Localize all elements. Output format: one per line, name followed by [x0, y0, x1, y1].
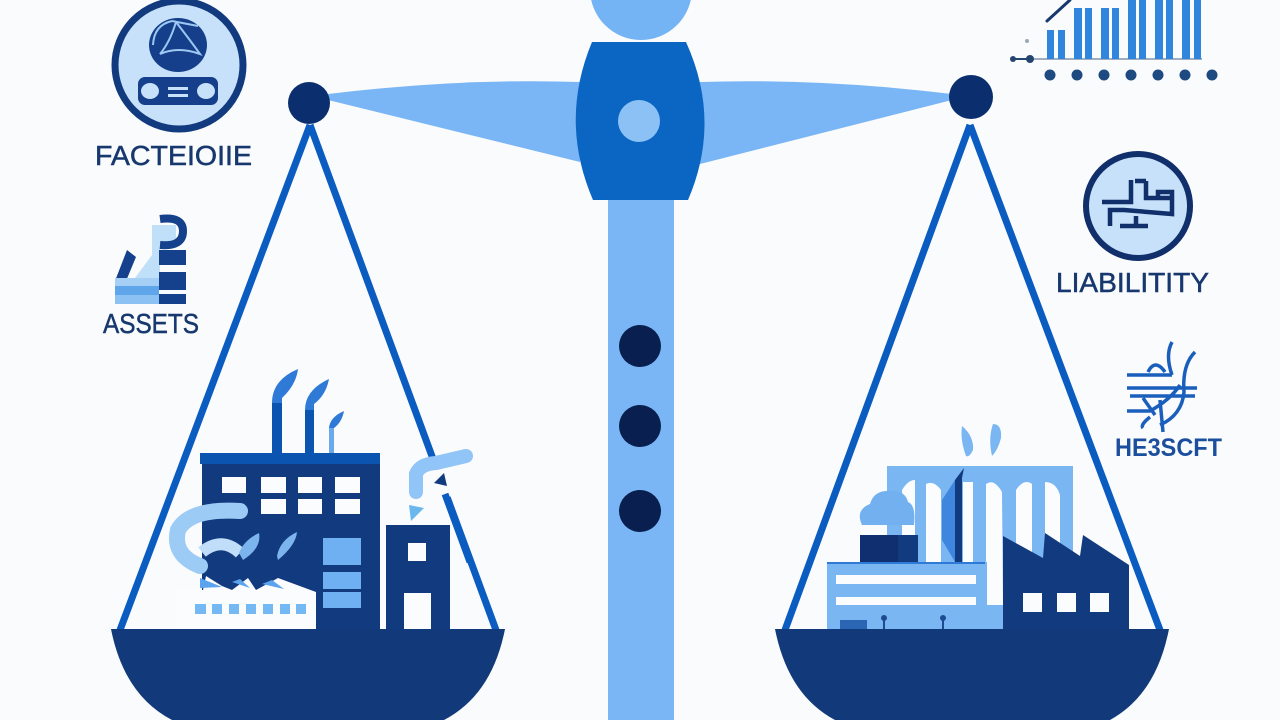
cross curves: [1142, 365, 1165, 428]
lower building: [827, 562, 987, 630]
factory windows: [1023, 593, 1109, 612]
connector block: [985, 605, 1003, 630]
white patch over string: [410, 450, 476, 522]
annex gap: [380, 530, 386, 630]
vertical pipes: [1160, 342, 1195, 432]
white base block: [176, 576, 316, 630]
curved pipe: [177, 511, 240, 566]
trend line: [1047, 0, 1070, 21]
building windows: [222, 477, 360, 514]
label: he3scft: HE3SCFT: [1115, 434, 1222, 462]
pole dots: [619, 325, 661, 532]
smoke: [962, 424, 1001, 456]
dot row: [1044, 70, 1218, 80]
tangled pipes icon: [1127, 342, 1197, 432]
annex door: [404, 593, 431, 630]
main building: [202, 463, 380, 630]
pole: [608, 195, 674, 720]
small flames: [239, 532, 297, 560]
sawtooth factory: [1003, 533, 1129, 630]
circuit glyph: [1102, 180, 1172, 226]
dark diagonal column: [955, 468, 964, 562]
label: facility: FACTEIOIIE: [95, 140, 252, 171]
panel details: [141, 83, 215, 99]
chart bars: [1047, 0, 1201, 59]
label: liability: LIABILITITY: [1056, 267, 1209, 298]
base squares: [195, 604, 306, 614]
light blue panels: [323, 538, 361, 608]
cloud: [860, 491, 914, 525]
right factory: [827, 424, 1129, 630]
stacked light layers: [115, 278, 159, 304]
roof band: [200, 453, 380, 464]
icon ring: [115, 1, 243, 129]
right scale strings: [785, 125, 1160, 630]
left pan: [111, 629, 505, 720]
annex building: [386, 525, 450, 630]
liability icon: [1086, 154, 1190, 258]
globe lines: [153, 21, 200, 54]
door: [840, 620, 867, 630]
inner pipe: [202, 544, 240, 553]
hub circle: [618, 100, 660, 142]
annex window: [408, 543, 426, 561]
left factory: [176, 369, 476, 630]
base blue edges: [200, 578, 284, 589]
string remainder: [445, 494, 470, 562]
central hub: [576, 42, 705, 200]
right pan: [775, 629, 1169, 720]
right pipe: [416, 456, 466, 492]
left scale strings: [120, 125, 496, 630]
lower bars: [836, 575, 976, 605]
pipe marks: [409, 473, 447, 521]
lamps: [882, 616, 945, 630]
scale column: [328, 0, 952, 720]
facility icon: [115, 1, 243, 129]
control panel: [138, 77, 218, 105]
horizontal pipes: [1127, 375, 1197, 411]
lower building roof: [827, 562, 985, 564]
thumb: [115, 250, 136, 281]
dark block: [860, 535, 898, 562]
shaded column: [942, 480, 955, 562]
globe: [149, 18, 207, 72]
label: assets: ASSETS: [103, 308, 199, 339]
top hook: [160, 218, 183, 245]
icon ring: [1086, 154, 1190, 258]
plant arches: [902, 480, 1060, 605]
light column: [135, 225, 176, 278]
assets icon: [115, 218, 186, 304]
stacked dark blocks: [159, 250, 186, 304]
chart axis: [1012, 58, 1202, 60]
beam wings: [328, 81, 952, 164]
dark block extension: [898, 535, 918, 562]
right pivot: [949, 75, 993, 119]
chimneys: [272, 369, 344, 453]
plant structure: [887, 466, 1073, 611]
bar chart: [1010, 0, 1218, 80]
axis markers: [1010, 39, 1034, 63]
top knob: [590, 0, 692, 40]
left pivot: [288, 82, 330, 124]
